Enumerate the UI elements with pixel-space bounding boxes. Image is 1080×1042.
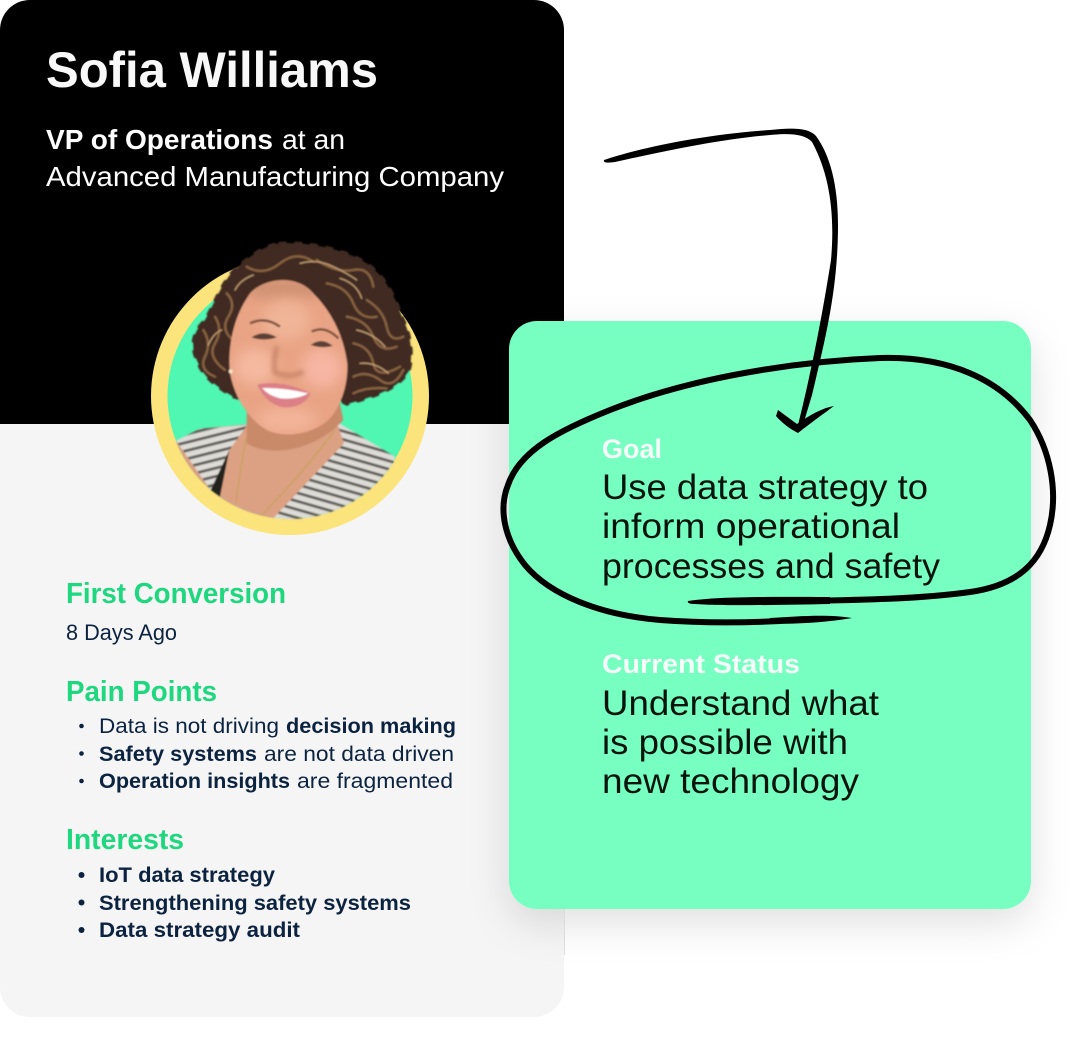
text block: goal: inform operational xyxy=(602,506,900,546)
text block: goal xyxy=(602,434,940,586)
section: first conversion: First Conversion xyxy=(66,578,286,610)
text block: goal: processes and safety xyxy=(602,546,940,586)
section: first conversion: 8 Days Ago xyxy=(66,620,177,645)
portrait: Sofia Williams xyxy=(151,243,429,535)
text block: job title xyxy=(46,124,504,192)
section: pain points: Data is not driving xyxy=(99,714,279,738)
text block: current status xyxy=(602,649,879,801)
section: pain points: decision making xyxy=(286,714,456,738)
section: pain points: Pain Points xyxy=(66,676,217,708)
section: interests: Interests xyxy=(66,824,184,856)
text block: current status: is possible with xyxy=(602,722,848,762)
text block: current status: new technology xyxy=(602,761,859,801)
section: first conversion xyxy=(66,578,286,645)
panel: goal and status card xyxy=(509,321,1031,909)
text block: job title: VP of Operations xyxy=(46,124,273,155)
text block: goal: Use data strategy to xyxy=(602,467,928,507)
panel: profile header xyxy=(0,0,564,424)
text block: job title: at an xyxy=(282,124,345,155)
section: pain points: Operation insights xyxy=(99,769,290,793)
section: interests: IoT data strategy xyxy=(99,863,275,887)
hand-drawn circle around goal xyxy=(503,358,1053,624)
section: interests: Data strategy audit xyxy=(99,918,300,942)
text block: current status: Current Status xyxy=(602,649,800,679)
section: pain points xyxy=(66,676,456,793)
heading: name: Sofia Williams xyxy=(46,42,378,98)
section: pain points: Safety systems xyxy=(99,742,257,766)
section: pain points: are fragmented xyxy=(297,769,453,793)
section: pain points: are not data driven xyxy=(264,742,454,766)
section: interests: Strengthening safety systems xyxy=(99,891,411,915)
text block: goal: Goal xyxy=(602,434,662,464)
section: interests xyxy=(66,824,411,942)
arrow pointing to goal xyxy=(604,129,838,433)
panel: profile details background xyxy=(0,424,564,1017)
text block: job title: Advanced Manufacturing Company xyxy=(46,161,504,192)
text block: current status: Understand what xyxy=(602,683,879,723)
